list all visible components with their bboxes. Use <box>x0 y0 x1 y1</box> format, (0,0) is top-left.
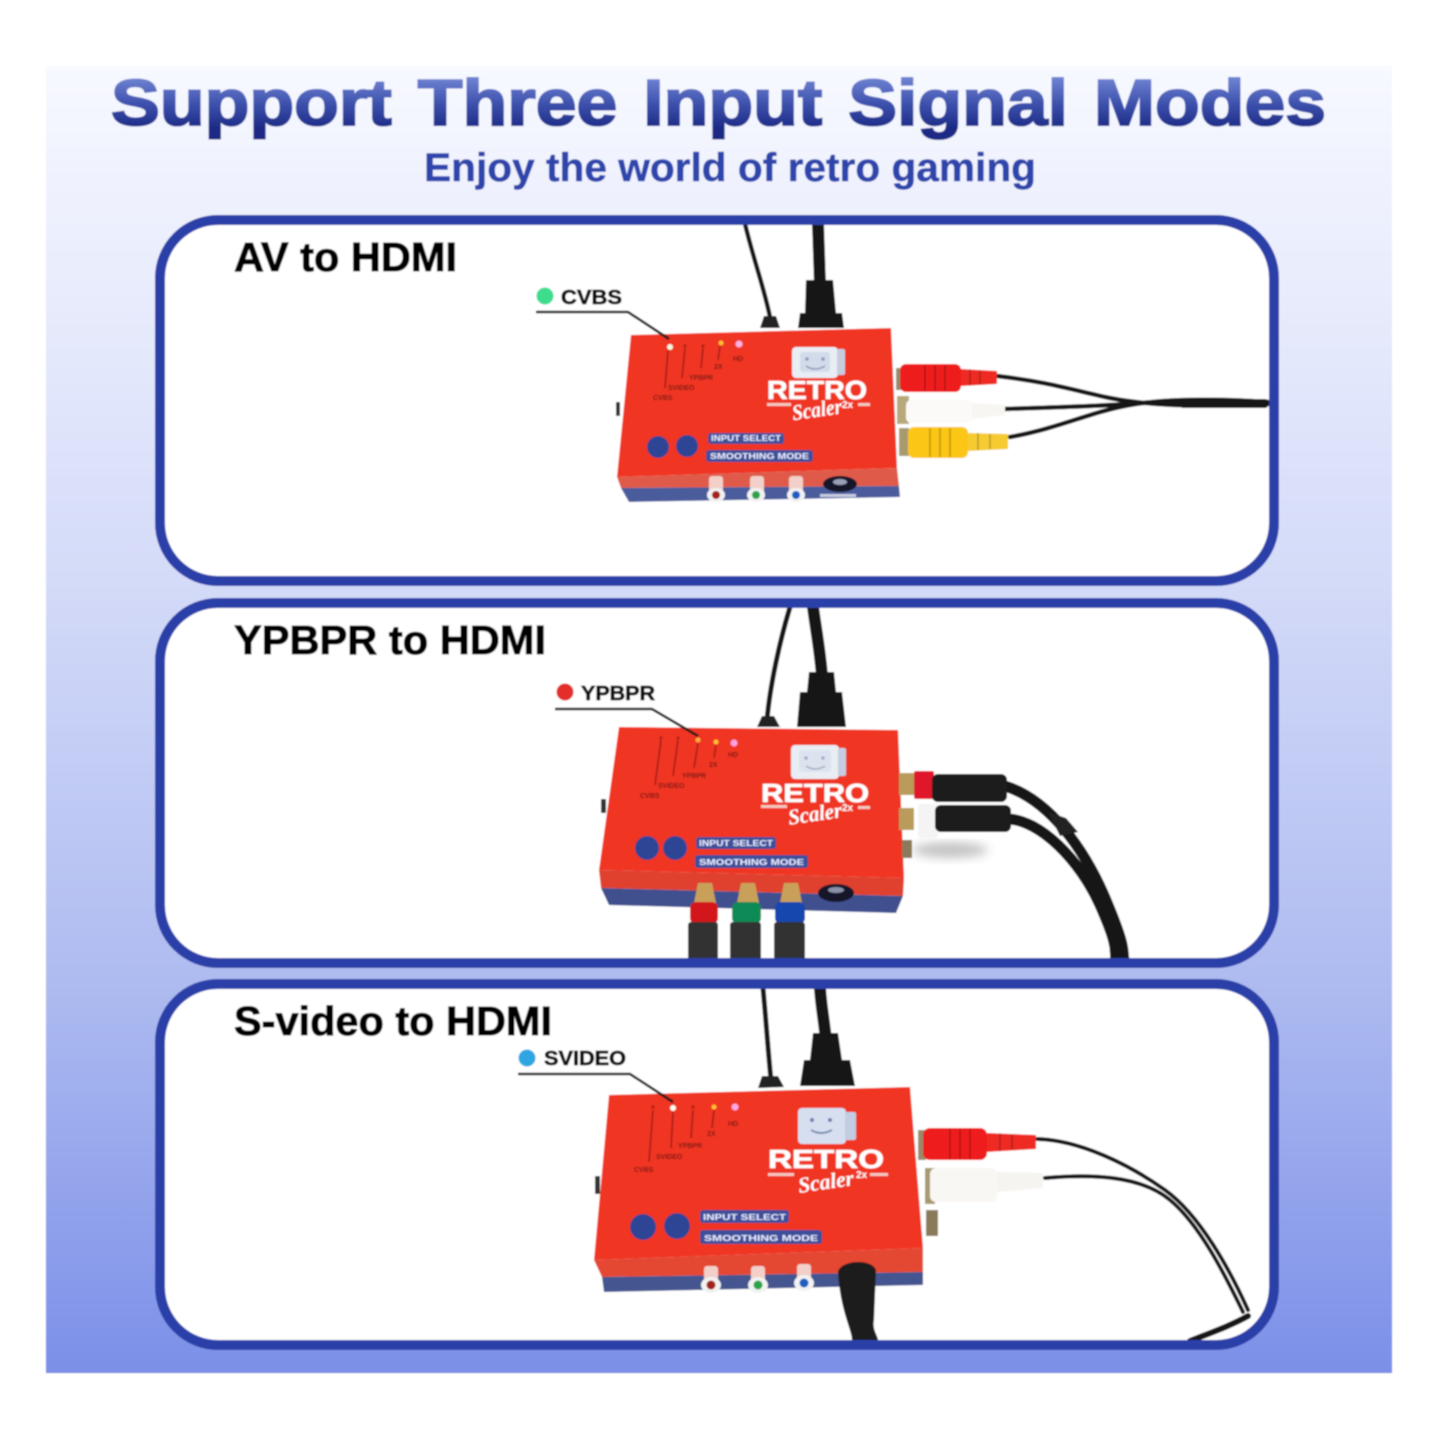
cable: USB power <box>757 607 790 727</box>
logo: Retro Scaler 2x: 2x <box>842 400 854 411</box>
LED indicators and labels: SVIDEO <box>658 783 685 790</box>
buttons <box>635 836 687 860</box>
LED indicators and labels: SVIDEO <box>656 1154 683 1161</box>
device: scaler, YPBPR <box>599 727 904 913</box>
LED indicators and labels: YPBPR <box>678 1143 702 1150</box>
cable: USB power <box>758 988 784 1088</box>
label: input select and smoothing mode <box>695 837 808 868</box>
LED indicators and labels: SVIDEO <box>668 385 695 392</box>
YPBPR component plugs <box>688 883 805 960</box>
device: scaler, AV <box>616 328 900 502</box>
callout: CVBS: CVBS <box>561 287 622 309</box>
LED indicators and labels: 2X <box>709 762 718 769</box>
callout: SVIDEO: SVIDEO <box>544 1048 626 1070</box>
label: input select and smoothing mode <box>700 1210 822 1244</box>
logo: Retro Scaler 2x: 2x <box>842 803 854 814</box>
logo: Retro Scaler 2x: RETRO <box>767 375 867 405</box>
device: scaler, S-video <box>594 1087 923 1293</box>
LED indicators and labels: CVBS <box>640 793 660 800</box>
callout: SVIDEO <box>518 1048 673 1102</box>
heading: AV to HDMI: AV to HDMI <box>234 234 457 280</box>
LED indicators and labels: HD <box>728 752 738 759</box>
callout: YPBPR: YPBPR <box>581 683 656 705</box>
LED indicators and labels: CVBS <box>653 395 673 402</box>
label: input select and smoothing mode <box>706 433 813 462</box>
logo: Retro Scaler 2x <box>767 347 870 425</box>
LED indicators and labels <box>634 1104 738 1174</box>
panel: YPBPR to HDMI <box>160 603 1274 963</box>
S-video port <box>818 884 854 902</box>
AV RCA cables <box>896 364 1268 458</box>
subtitle: Enjoy the world of retro gaming <box>424 146 1036 190</box>
cable: USB power <box>745 224 780 328</box>
cable: HDMI <box>798 224 844 328</box>
logo: Retro Scaler 2x: RETRO <box>761 778 869 808</box>
S-video plug <box>838 1262 878 1340</box>
logo: Retro Scaler 2x <box>768 1108 888 1198</box>
LED indicators and labels <box>640 736 738 800</box>
label: input select and smoothing mode: INPUT SELECT <box>711 434 781 443</box>
label: input select and smoothing mode: SMOOTHING MODE <box>704 1234 819 1243</box>
label: input select and smoothing mode: SMOOTHING MODE <box>710 452 810 461</box>
LED indicators and labels: HD <box>733 356 743 363</box>
callout: YPBPR <box>555 683 698 736</box>
logo: Retro Scaler 2x: 2x <box>856 1170 868 1181</box>
LED indicators and labels: CVBS <box>634 1167 654 1174</box>
logo: Retro Scaler 2x <box>761 745 870 830</box>
LED indicators and labels: HD <box>728 1121 738 1128</box>
LED indicators and labels <box>653 340 743 402</box>
buttons <box>647 435 698 458</box>
LED indicators and labels: 2X <box>707 1131 716 1138</box>
S-video RCA audio cables <box>918 1128 1248 1341</box>
heading: YPBPR to HDMI: YPBPR to HDMI <box>234 617 546 663</box>
buttons <box>630 1213 690 1240</box>
label: input select and smoothing mode: INPUT SELECT <box>703 1213 786 1222</box>
callout: CVBS <box>536 287 669 339</box>
component ports <box>701 1264 814 1293</box>
panel: S-video to HDMI <box>160 984 1274 1345</box>
heading: S-video to HDMI: S-video to HDMI <box>234 998 552 1044</box>
YPBPR RCA cables <box>899 771 1124 960</box>
LED indicators and labels: 2X <box>714 364 723 371</box>
logo: Retro Scaler 2x: Scaler <box>796 1165 856 1198</box>
panel: AV to HDMI <box>160 220 1274 581</box>
label: input select and smoothing mode: INPUT SELECT <box>699 839 773 848</box>
cable: HDMI <box>800 988 855 1086</box>
label: input select and smoothing mode: SMOOTHING MODE <box>699 858 805 867</box>
LED indicators and labels: YPBPR <box>689 375 713 382</box>
title: Support Three Input Signal Modes <box>111 66 1326 139</box>
LED indicators and labels: YPBPR <box>682 773 706 780</box>
component ports <box>707 476 857 502</box>
cable: HDMI <box>797 607 846 727</box>
logo: Retro Scaler 2x: Scaler <box>786 797 844 830</box>
logo: Retro Scaler 2x: Scaler <box>790 393 844 425</box>
logo: Retro Scaler 2x: RETRO <box>768 1144 884 1174</box>
